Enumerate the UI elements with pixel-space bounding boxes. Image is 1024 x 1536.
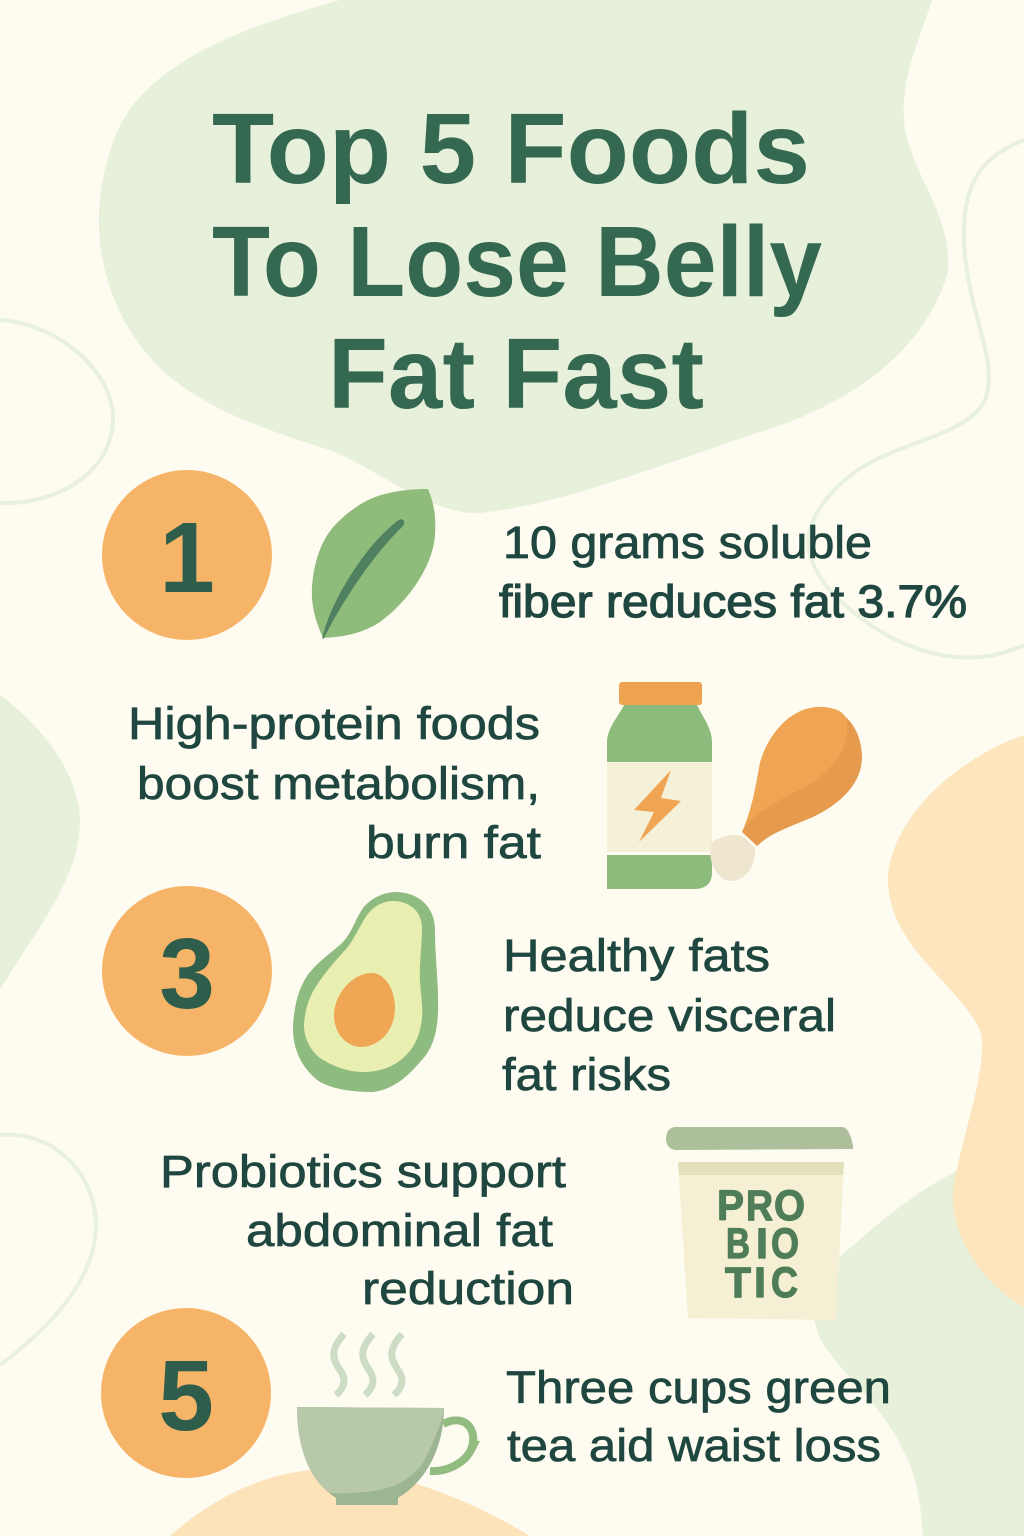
icon: leaf (312, 489, 435, 638)
number badge 5: 5 (158, 1340, 214, 1452)
background: left green blob (0, 695, 80, 990)
text: tea fact: tea aid waist loss (507, 1420, 881, 1471)
icon: probiotic tub: C (771, 1259, 798, 1307)
icon: avocado (293, 892, 438, 1092)
item 5: green tea (101, 1308, 891, 1505)
title: Fat Fast (328, 318, 704, 430)
item 4: probiotics (160, 1127, 853, 1320)
text: tea fact (506, 1362, 891, 1471)
icon: probiotic tub: I (754, 1259, 766, 1307)
text: fiber fact: 10 grams soluble (503, 517, 872, 568)
text: probiotics fact: reduction (362, 1263, 574, 1314)
number badge 5 (101, 1308, 271, 1478)
text: fats fact: reduce visceral (503, 990, 836, 1041)
icon: probiotic tub: O (774, 1182, 805, 1230)
icon: probiotic tub (666, 1127, 853, 1320)
number badge 1 (102, 470, 272, 640)
icon: protein bottle (606, 682, 713, 889)
text: tea fact: Three cups green (506, 1362, 891, 1413)
number badge 3: 3 (159, 918, 215, 1030)
background: right outline curve (809, 140, 1024, 658)
text: fats fact: fat risks (502, 1049, 671, 1100)
text: probiotics fact (160, 1146, 574, 1314)
number badge 3 (102, 886, 272, 1056)
text: probiotics fact: Probiotics support (160, 1146, 567, 1197)
background: right peach blob (888, 735, 1024, 1307)
background: lower-left outline curve (0, 1135, 96, 1365)
text: protein fact (128, 698, 542, 868)
background: upper-left outline curve (0, 320, 113, 503)
text: protein fact: boost metabolism, (137, 758, 540, 809)
item 1: fiber (102, 470, 967, 640)
icon: probiotic tub: T (725, 1259, 751, 1307)
icon: tea cup (297, 1334, 480, 1505)
icon: probiotic tub: P (717, 1182, 744, 1230)
text: protein fact: High-protein foods (128, 698, 540, 749)
title: Top 5 Foods (212, 93, 810, 205)
item 3: healthy fats (102, 886, 836, 1100)
title (212, 93, 822, 430)
icon: probiotic tub: B (726, 1220, 750, 1268)
text: fats fact (502, 930, 836, 1100)
background: top green blob (99, 0, 948, 513)
text: fats fact: Healthy fats (503, 930, 770, 981)
icon: probiotic tub: R (746, 1182, 773, 1230)
icon: chicken drumstick (710, 707, 862, 881)
icon: probiotic tub: O (771, 1220, 799, 1268)
text: fiber fact (499, 517, 967, 627)
number badge 1: 1 (159, 502, 215, 614)
text: fiber fact: fiber reduces fat 3.7% (499, 576, 967, 627)
background: bottom peach blob (170, 1470, 530, 1536)
icon: probiotic tub: I (756, 1220, 768, 1268)
text: probiotics fact: abdominal fat (246, 1205, 554, 1256)
background: bottom-right green blob (815, 1120, 1024, 1536)
item 2: protein (128, 682, 862, 889)
title: To Lose Belly (212, 206, 822, 318)
text: protein fact: burn fat (366, 817, 542, 868)
